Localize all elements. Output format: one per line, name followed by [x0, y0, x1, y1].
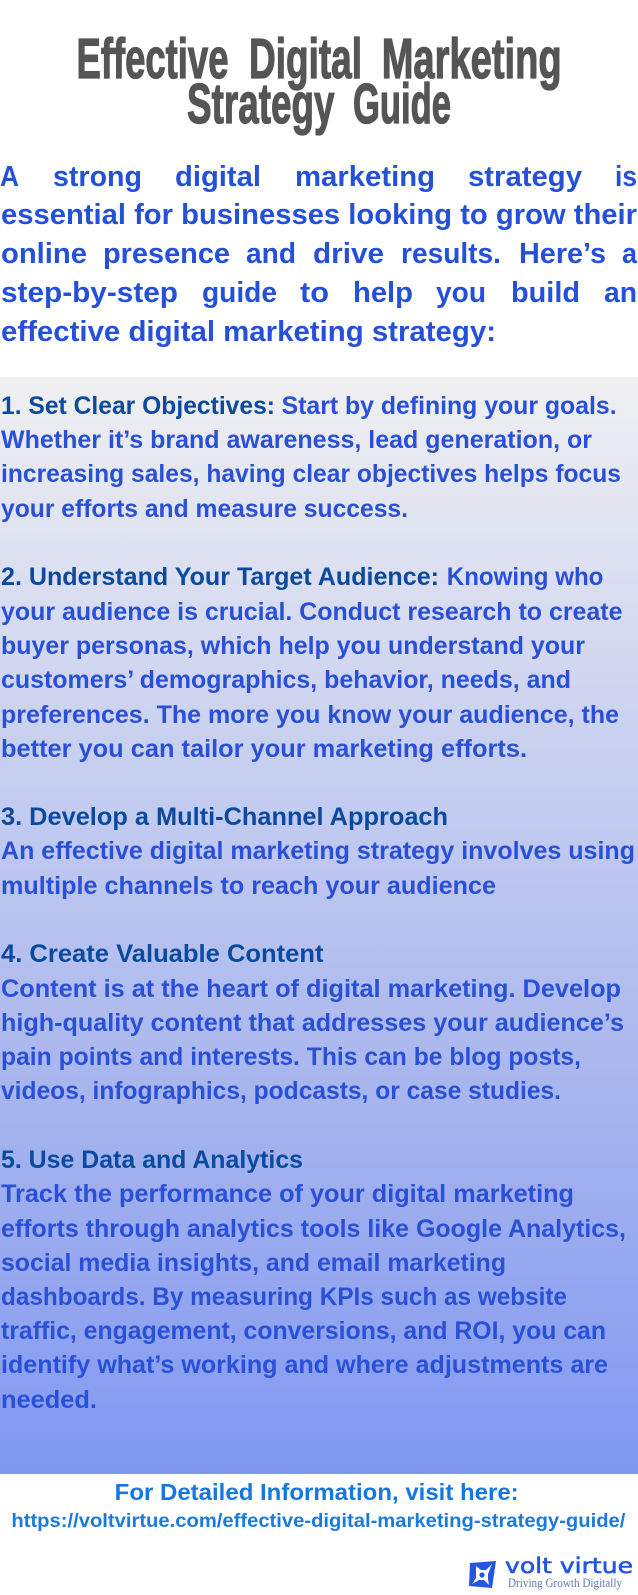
- icon: logo mark: [469, 1561, 496, 1588]
- step 5: use data and analytics: efforts through analytics tools like Google Analytics,: [1, 1215, 626, 1243]
- footer call to action: For Detailed Information, visit here:: [115, 1479, 519, 1505]
- brand name: volt virtue: [505, 1554, 633, 1578]
- step 1: set clear objectives: increasing sales, having clear objectives helps focus: [1, 460, 621, 488]
- step 5: use data and analytics: Track the performance of your digital marketing: [1, 1180, 574, 1208]
- step 5: use data and analytics: traffic, engagement, conversions, and ROI, you can: [1, 1317, 606, 1345]
- intro paragraph: a: [622, 238, 638, 270]
- intro paragraph: digital: [175, 161, 261, 193]
- step 4: create valuable content: high-quality content that addresses your audience’s: [1, 1009, 624, 1037]
- step 2: understand your target audience: preferences. The more you know your audience, the: [1, 701, 619, 729]
- step 5: use data and analytics: social media insights, and email marketing: [1, 1249, 506, 1277]
- step 4: create valuable content: [1, 940, 624, 1105]
- step 2: understand your target audience: better you can tailor your marketing efforts.: [1, 735, 527, 763]
- title: [76, 27, 562, 136]
- intro paragraph: A: [0, 161, 19, 193]
- step 1: set clear objectives: your efforts and measure success.: [1, 495, 408, 523]
- step 4: create valuable content: videos, infographics, podcasts, or case studies.: [1, 1077, 561, 1105]
- intro paragraph: [0, 161, 638, 348]
- tagline: Driving Growth Digitally: [508, 1576, 623, 1590]
- step 1: set clear objectives: 1. Set Clear Objectives:: [1, 392, 275, 420]
- intro paragraph: you: [436, 277, 486, 309]
- step 5: use data and analytics: identify what’s working and where adjustments are: [1, 1351, 608, 1379]
- step 3: develop a multi-channel approach: multiple channels to reach your audience: [1, 872, 496, 900]
- intro paragraph: an: [604, 277, 637, 309]
- footer url: https://voltvirtue.com/effective-digital-marketing-strategy-guide/: [11, 1510, 626, 1532]
- intro paragraph: marketing: [295, 161, 435, 193]
- step 3: develop a multi-channel approach: An effective digital marketing strategy involves using: [1, 837, 635, 865]
- step 2: understand your target audience: [1, 563, 623, 763]
- title: Digital: [249, 27, 362, 91]
- panel: steps gradient background: [0, 377, 638, 1474]
- step 2: understand your target audience: Knowing who: [447, 563, 603, 591]
- step 5: use data and analytics: needed.: [1, 1386, 97, 1414]
- intro paragraph: and: [246, 238, 296, 270]
- title: Guide: [353, 72, 451, 136]
- intro paragraph: to: [300, 277, 329, 309]
- step 1: set clear objectives: [1, 392, 621, 523]
- step 2: understand your target audience: customers’ demographics, behavior, needs, and: [1, 666, 571, 694]
- intro paragraph: guide: [202, 277, 277, 309]
- intro paragraph: step-by-step: [1, 277, 178, 309]
- logo: volt virtue: [469, 1554, 633, 1590]
- step 3: develop a multi-channel approach: [1, 803, 635, 900]
- intro paragraph: strong: [53, 161, 142, 193]
- intro paragraph: essential for businesses looking to grow their: [1, 199, 637, 231]
- step 1: set clear objectives: Start by defining your goals.: [282, 392, 617, 420]
- intro paragraph: online: [1, 238, 87, 270]
- step 3: develop a multi-channel approach: 3. Develop a Multi-Channel Approach: [1, 803, 448, 831]
- intro paragraph: help: [353, 277, 413, 309]
- intro paragraph: build: [511, 277, 580, 309]
- step 1: set clear objectives: Whether it’s brand awareness, lead generation, or: [1, 426, 592, 454]
- step 5: use data and analytics: dashboards. By measuring KPIs such as website: [1, 1283, 567, 1311]
- step 2: understand your target audience: 2. Understand Your Target Audience:: [1, 563, 439, 591]
- step 5: use data and analytics: 5. Use Data and Analytics: [1, 1146, 303, 1174]
- step 4: create valuable content: 4. Create Valuable Content: [1, 940, 324, 968]
- step 5: use data and analytics: [1, 1146, 626, 1414]
- intro paragraph: effective digital marketing strategy:: [1, 316, 496, 348]
- intro paragraph: drive: [313, 238, 384, 270]
- step 4: create valuable content: pain points and interests. This can be blog posts,: [1, 1043, 581, 1071]
- intro paragraph: strategy: [468, 161, 582, 193]
- step 2: understand your target audience: buyer personas, which help you understand your: [1, 632, 585, 660]
- intro paragraph: results.: [401, 238, 501, 270]
- intro paragraph: Here’s: [519, 238, 606, 270]
- step 4: create valuable content: Content is at the heart of digital marketing. Develop: [1, 975, 621, 1003]
- intro paragraph: presence: [103, 238, 230, 270]
- step 2: understand your target audience: your audience is crucial. Conduct research to create: [1, 598, 623, 626]
- title: Effective: [76, 27, 228, 91]
- title: Strategy: [187, 72, 335, 136]
